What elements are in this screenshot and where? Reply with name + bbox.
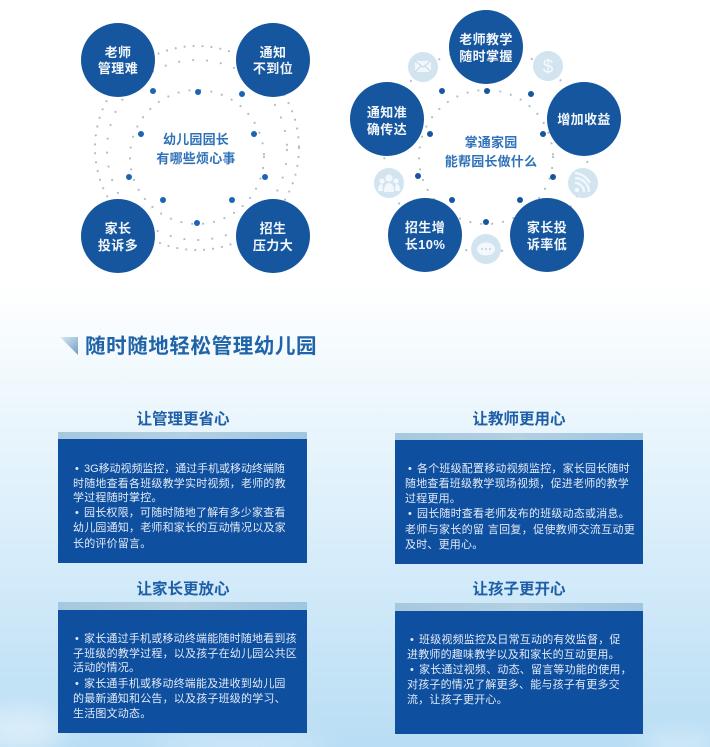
panel: teachers (395, 409, 643, 564)
section heading (60, 335, 317, 358)
panel text (73, 461, 286, 550)
panel box (395, 603, 643, 734)
circle: fewer complaints (510, 198, 584, 272)
panel title: 让教师更用心 (472, 409, 566, 428)
panel text: 对孩子的情况了解更多、能与孩子有更多交 (407, 677, 620, 691)
panel text: • (75, 633, 79, 645)
panel text: • (408, 508, 412, 520)
panel text: 随地查看班级教学现场视频，促进老师的教学 (405, 476, 629, 490)
circle: teacher management (81, 23, 155, 97)
circle: enrolment growth (388, 198, 462, 272)
centre text: 幼儿园园长 (163, 132, 229, 147)
panel text: 流，让孩子更开心。 (407, 692, 508, 706)
icon: mail (408, 52, 438, 82)
panel box (58, 602, 307, 733)
heading text: 随时随地轻松管理幼儿园 (85, 335, 317, 358)
centre text (156, 132, 236, 166)
panel title: 让管理更省心 (136, 409, 230, 428)
centre text: 掌通家园 (465, 135, 517, 150)
circle: teaching: 随时掌握 (459, 49, 513, 64)
panel text: 过程更用。 (405, 492, 461, 505)
circle: enrolment growth: 长10% (405, 237, 445, 252)
panel text: 生活图文动态。 (73, 706, 151, 720)
panel text: 家长通过手机或移动终端能随时随地看到孩 (84, 631, 297, 645)
icon: rss (568, 168, 598, 198)
icon: dollar: $ (543, 57, 554, 78)
circle: enrolment growth: 招生增 (405, 220, 445, 235)
panel text (405, 461, 635, 551)
panel text: 园长权限，可随时随地了解有多少家查看 (84, 505, 286, 519)
panel text: • (410, 634, 414, 646)
panel text: • (75, 463, 79, 475)
panel text: • (408, 463, 412, 475)
diagram: what the product does (350, 10, 621, 272)
icon: chat bubble (471, 234, 501, 264)
panel text (407, 632, 632, 706)
circle: accurate notices (350, 82, 424, 156)
circle: parent complaints: 家长 (105, 221, 131, 236)
panel box (395, 433, 643, 564)
panel text: 家长通过视频、动态、留言等功能的使用， (419, 662, 632, 676)
circle: notices: 通知 (260, 45, 286, 60)
icon: triangle (60, 337, 78, 355)
connector dots (126, 88, 268, 226)
panel text: 各个班级配置移动视频监控，家长园长随时 (417, 461, 630, 475)
icon: people (374, 168, 404, 198)
panel text: 活动的情况。 (73, 660, 140, 674)
panel text: 班级视频监控及日常互动的有效监督，促 (419, 632, 621, 646)
circle: revenue: 增加收益 (557, 112, 611, 127)
panel: parents (58, 579, 307, 733)
centre text: 有哪些烦心事 (156, 151, 236, 166)
panel text: 及时、更用心。 (405, 538, 483, 551)
circle: enrolment: 招生 (260, 221, 286, 236)
connector dots (415, 88, 556, 225)
background clouds (0, 708, 710, 747)
panel title: 让家长更放心 (136, 579, 230, 598)
circle: fewer complaints: 家长投 (527, 220, 567, 235)
panel text: • (75, 678, 79, 690)
panel text: 长的评价留言。 (73, 536, 151, 550)
panel text: 幼儿园通知，老师和家长的互动情况以及家 (73, 520, 286, 534)
dotted rings (384, 48, 588, 252)
diagram: principal's worries (81, 23, 310, 273)
panel: management (58, 409, 307, 563)
circle: accurate notices: 通知准 (367, 105, 407, 120)
dotted rings (95, 46, 299, 250)
circle: teaching: 老师教学 (459, 32, 513, 47)
centre text (445, 135, 537, 169)
circle: enrolment (236, 199, 310, 273)
panel text: 子班级的教学过程，以及孩子在幼儿园公共区 (73, 646, 297, 660)
circle: enrolment: 压力大 (253, 238, 293, 253)
circle: parent complaints (81, 199, 155, 273)
panel box (58, 432, 307, 563)
panel text: 学过程随时掌控。 (73, 490, 163, 504)
circle: teacher management: 管理难 (98, 61, 138, 76)
circle: teacher management: 老师 (105, 45, 131, 60)
panel text: 时随地查看各班级教学实时视频，老师的教 (73, 476, 286, 490)
circle: notices: 不到位 (253, 61, 293, 76)
panel text: 老师与家长的留 言回复，促使教师交流互动更 (405, 522, 635, 536)
panel title: 让孩子更开心 (472, 579, 566, 598)
panel text: • (410, 664, 414, 676)
panel text: 的最新通知和公告，以及孩子班级的学习、 (73, 691, 286, 705)
circle: fewer complaints: 诉率低 (527, 237, 567, 252)
circle: revenue (547, 82, 621, 156)
circle: accurate notices: 确传达 (367, 122, 407, 137)
circle: parent complaints: 投诉多 (98, 238, 138, 253)
panel text: 家长通手机或移动终端能及进收到幼儿园 (84, 676, 286, 690)
icon: dollar (533, 51, 563, 81)
panel text: 3G移动视频监控，通过手机或移动终端随 (84, 461, 285, 475)
panel text: • (75, 507, 79, 519)
panel text (73, 631, 297, 720)
circle: teaching (449, 10, 523, 84)
circle: notices (236, 23, 310, 97)
panel: children (395, 579, 643, 734)
panel text: 进教师的趣味教学以及和家长的互动更用。 (407, 647, 620, 661)
panel text: 园长随时查看老师发布的班级动态或消息。 (417, 506, 630, 520)
centre text: 能帮园长做什么 (445, 154, 537, 169)
